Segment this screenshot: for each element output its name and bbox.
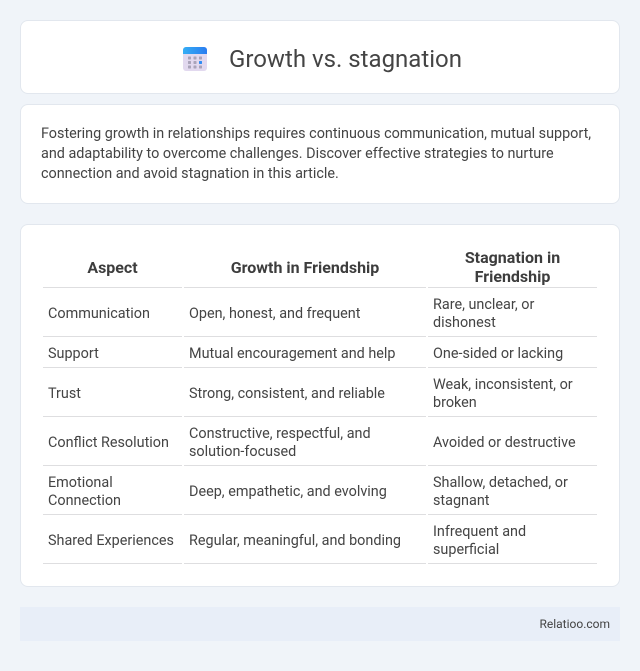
row: conflict resolution: solution-focused (189, 443, 296, 460)
row: emotional connection: stagnant (433, 492, 489, 509)
row: communication: Open, honest, and frequent (189, 305, 360, 322)
column headers: Aspect (87, 258, 138, 277)
row: emotional connection: Shallow, detached, or (433, 474, 568, 491)
row: emotional connection: Emotional (48, 474, 113, 491)
column headers: Stagnation in (465, 248, 560, 267)
row: conflict resolution (48, 425, 576, 460)
footer bar (20, 607, 620, 641)
row: support: Support (48, 345, 99, 362)
row: shared experiences: Infrequent and (433, 523, 526, 540)
row: conflict resolution: Constructive, respectful, and (189, 425, 371, 442)
row: shared experiences: Regular, meaningful, and bonding (189, 532, 401, 549)
header card (20, 20, 620, 94)
row: shared experiences (48, 523, 526, 558)
intro paragraph: and adaptability to overcome challenges. Discover effective strategies to nurture (41, 145, 554, 162)
row: emotional connection (48, 474, 568, 509)
row: communication: Communication (48, 305, 150, 322)
row: trust: Weak, inconsistent, or (433, 376, 573, 393)
column headers (87, 248, 560, 286)
row: communication (48, 296, 534, 331)
column headers: Growth in Friendship (231, 258, 379, 277)
intro paragraph: connection and avoid stagnation in this article. (41, 165, 339, 182)
intro paragraph: Fostering growth in relationships requires continuous communication, mutual support, (41, 125, 591, 142)
row: emotional connection: Connection (48, 492, 121, 509)
row: shared experiences: superficial (433, 541, 499, 558)
row: support (48, 345, 563, 362)
row: trust (48, 376, 573, 411)
footer source: Relatioo.com (539, 617, 610, 631)
intro text panel (20, 104, 620, 204)
row: support: Mutual encouragement and help (189, 345, 396, 362)
row: communication: dishonest (433, 314, 496, 331)
comparison table panel (20, 224, 620, 587)
row: support: One-sided or lacking (433, 345, 563, 362)
intro paragraph (41, 125, 591, 182)
title: Growth vs. stagnation (229, 45, 462, 73)
row: emotional connection: Deep, empathetic, and evolving (189, 483, 387, 500)
row: shared experiences: Shared Experiences (48, 532, 174, 549)
row: conflict resolution: Avoided or destructive (433, 434, 576, 451)
row: communication: Rare, unclear, or (433, 296, 534, 313)
icon: calendar (183, 47, 207, 71)
row: trust: broken (433, 394, 477, 411)
column headers: Friendship (475, 267, 550, 286)
row: trust: Strong, consistent, and reliable (189, 385, 385, 402)
row: conflict resolution: Conflict Resolution (48, 434, 169, 451)
row: trust: Trust (48, 385, 81, 402)
